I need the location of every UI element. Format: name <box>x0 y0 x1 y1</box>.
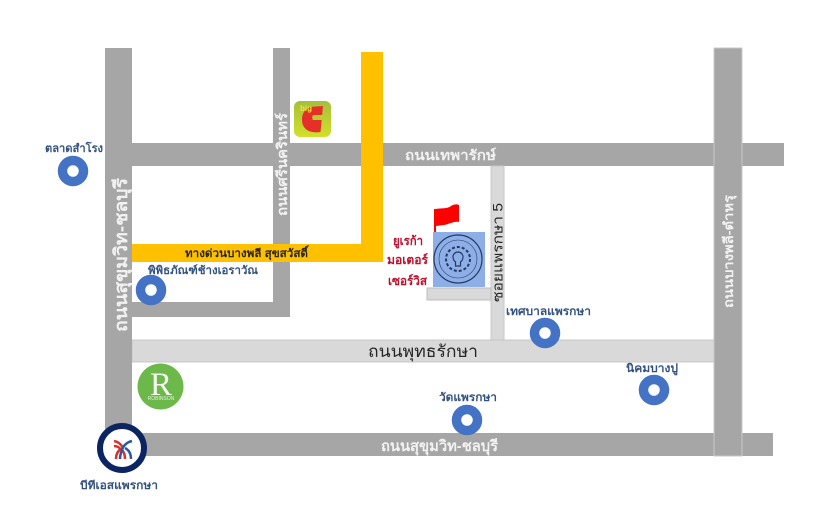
road: Bangna expressway yellow <box>132 52 383 262</box>
icon: Big C <box>294 101 331 137</box>
road: access stub <box>427 288 491 300</box>
road: Srinakarin <box>132 48 290 317</box>
icon: Robinson <box>138 364 184 410</box>
road: Bangna expressway yellow: ทางด่วนบางพลี สุขสวัสดิ์ <box>185 245 310 261</box>
marker: Bangpoo Industrial Estate: นิคมบางปู <box>626 362 678 376</box>
road: Sukhumvit-Chonburi left <box>105 48 133 440</box>
marker: Wat Phraeksa <box>439 391 497 430</box>
icon: Robinson: ROBINSON <box>148 396 175 402</box>
marker: Erawan Museum <box>140 264 259 300</box>
building logo: Eureka <box>433 232 485 287</box>
marker: Erawan Museum: พิพิธภัณฑ์ช้างเอราวัณ <box>148 264 259 277</box>
label: Eureka Motor Service <box>387 234 429 288</box>
marker: Bangpoo Industrial Estate <box>626 362 678 400</box>
road: Sukhumvit-Chonburi bottom: ถนนสุขุมวิท-ชลบุรี <box>381 437 499 456</box>
marker: Phraeksa Municipality: เทศบาลแพรกษา <box>506 306 591 318</box>
road: Phuttharaksa: ถนนพุทธรักษา <box>368 342 478 362</box>
road: Bang Phli-Tamru: ถนนบางพลี-ตำหรุ <box>721 195 737 308</box>
marker: Samrong Market <box>45 141 103 182</box>
road: Srinakarin: ถนนศรีนครินทร์ <box>274 112 290 216</box>
road: Soi Phraeksa 5 <box>490 166 506 340</box>
label: Eureka Motor Service: เซอร์วิส <box>388 274 428 288</box>
marker: Phraeksa Municipality <box>506 306 591 344</box>
label: Eureka Motor Service: ยูเรก้า <box>393 234 423 249</box>
road: Soi Phraeksa 5: ซอยแพรกษา 5 <box>490 203 506 302</box>
marker: Wat Phraeksa: วัดแพรกษา <box>439 391 497 404</box>
road: Thepharak: ถนนเทพารักษ์ <box>405 147 496 163</box>
road: Sukhumvit-Chonburi left: ถนนสุขุมวิท-ชลบุรี <box>111 178 133 332</box>
label: Eureka Motor Service: มอเตอร์ <box>387 253 429 267</box>
icon: Robinson: R <box>150 367 172 403</box>
icon: Big C: big <box>300 104 312 113</box>
road: Sukhumvit-Chonburi bottom <box>130 433 773 456</box>
icon: red flag <box>434 204 459 233</box>
road: Thepharak <box>130 143 784 166</box>
marker: Samrong Market: ตลาดสำโรง <box>45 141 103 155</box>
icon: BTS Phraeksa <box>100 426 144 470</box>
road: Bang Phli-Tamru <box>714 48 742 456</box>
label: BTS Phraeksa: บีทีเอสแพรกษา <box>80 479 158 492</box>
road: Phuttharaksa <box>132 340 714 362</box>
